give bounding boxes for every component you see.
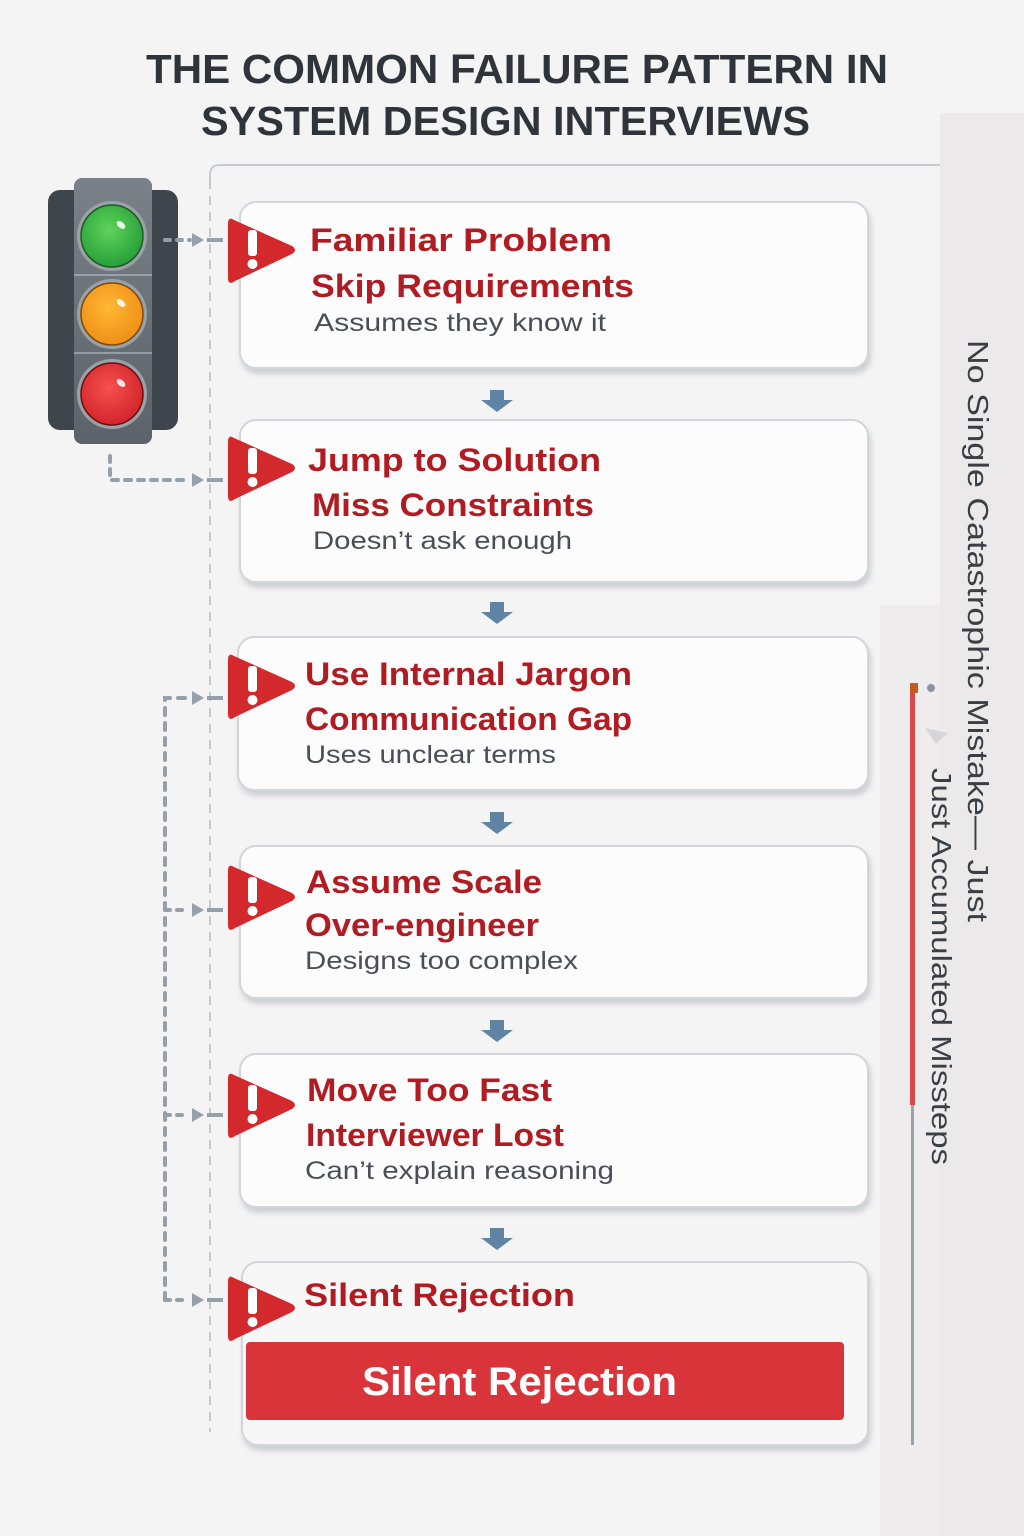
card 1: Assumes they know it <box>314 309 606 337</box>
icon: traffic light <box>48 178 178 444</box>
arrow: down 4 <box>481 1020 513 1042</box>
side text: secondary: Just Accumulated Missteps <box>926 768 957 1165</box>
title <box>146 46 888 144</box>
card 1: Familiar Problem <box>310 222 612 258</box>
side panel: right <box>880 113 1024 1536</box>
card 4: Designs too complex <box>305 947 579 975</box>
arrow: down 1 <box>481 390 513 412</box>
card 2: Jump to Solution <box>308 442 601 478</box>
card 3: Communication Gap <box>305 701 632 737</box>
title: SYSTEM DESIGN INTERVIEWS <box>201 98 810 144</box>
card 3 <box>228 637 868 790</box>
card 4: Over-engineer <box>305 907 539 943</box>
card 2: Doesn’t ask enough <box>313 527 572 555</box>
arrow: down 5 <box>481 1228 513 1250</box>
card 3: Use Internal Jargon <box>305 656 632 692</box>
card 3: Uses unclear terms <box>305 741 556 769</box>
card 4 <box>228 846 868 998</box>
card 5 <box>228 1054 868 1207</box>
timeline bar: right <box>910 683 948 1445</box>
card 2: Miss Constraints <box>312 487 594 523</box>
arrow: down 3 <box>481 812 513 834</box>
arrows: connectors from traffic light <box>110 240 190 1300</box>
card 1: Skip Requirements <box>311 268 634 304</box>
red bar <box>246 1342 844 1420</box>
card 5: Interviewer Lost <box>306 1117 564 1153</box>
title: THE COMMON FAILURE PATTERN IN <box>146 46 888 92</box>
red bar: Silent Rejection <box>362 1360 677 1404</box>
side text: main: No Single Catastrophic Mistake— Just <box>961 340 993 922</box>
card 1 <box>228 202 868 368</box>
card 6: silent rejection <box>228 1262 868 1445</box>
card 5: Can’t explain reasoning <box>305 1157 614 1185</box>
card 5: Move Too Fast <box>307 1072 552 1108</box>
arrow: down 2 <box>481 602 513 624</box>
card 6: silent rejection: Silent Rejection <box>304 1277 575 1313</box>
card 2 <box>228 420 868 582</box>
card 4: Assume Scale <box>306 864 542 900</box>
